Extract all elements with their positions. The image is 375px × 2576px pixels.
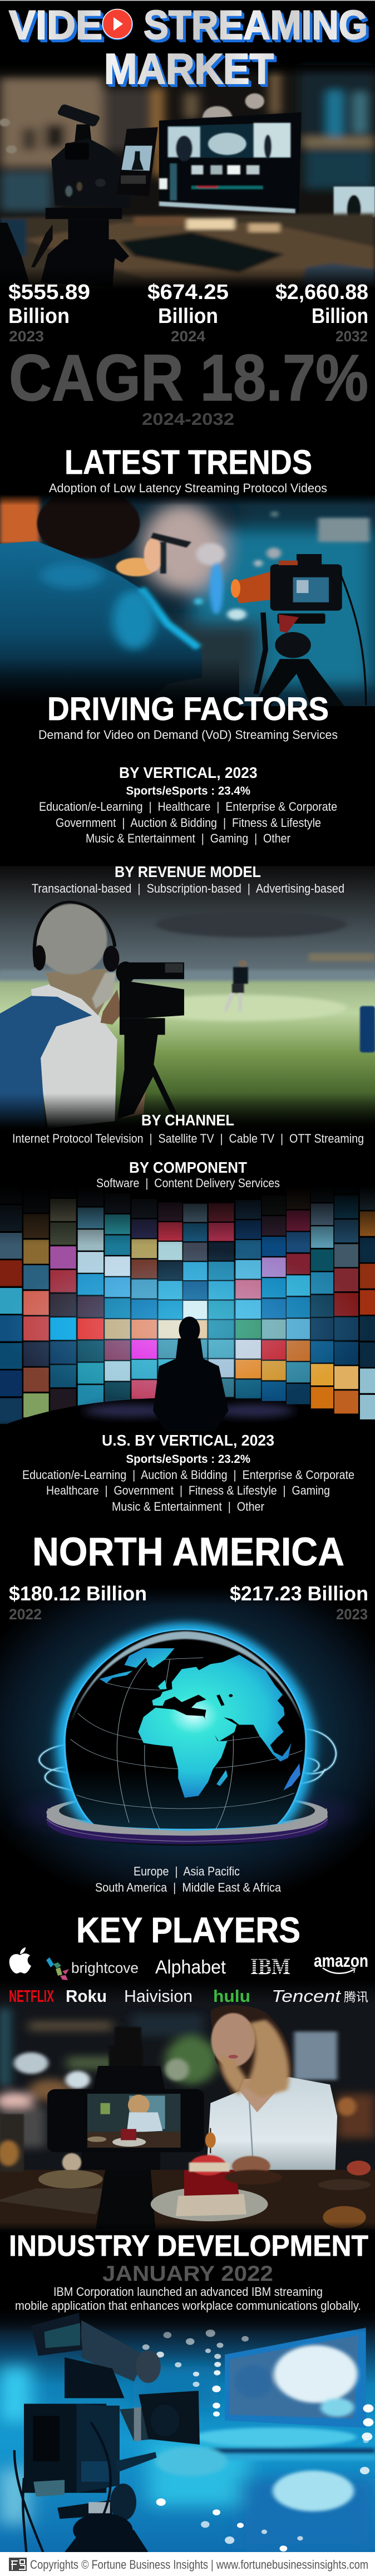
segment: by component: Software | Content Delivery Services <box>96 1176 280 1190</box>
player <box>224 960 248 1012</box>
segment: by vertical 2023 <box>39 764 337 845</box>
heading: key players: KEY PLAYERS <box>76 1910 300 1950</box>
photo: cameraman at stadium <box>0 866 375 1129</box>
heading: industry development <box>9 2230 368 2313</box>
phone preview <box>47 2089 204 2152</box>
market size stats: Billion <box>312 305 368 328</box>
cameraman <box>0 902 146 1129</box>
logo: brightcove: brightcove <box>71 1960 139 1976</box>
broadcast camera <box>116 962 184 1119</box>
north america stats: $180.12 Billion <box>9 1582 147 1605</box>
title: MARKET <box>104 45 274 93</box>
market size stats: $674.25 <box>147 281 229 304</box>
market size stats <box>8 281 368 345</box>
DSLR camera on tripod <box>231 554 366 706</box>
segment: by vertical 2023: Sports/eSports : 23.4% <box>126 785 250 797</box>
video wall tiles <box>0 1150 375 1424</box>
segment: U.S. by vertical 2023: Music & Entertainment | Other <box>112 1500 264 1514</box>
logo: tencent: 腾讯 <box>344 1990 368 2004</box>
other regions list: Europe | Asia Pacific <box>134 1864 240 1878</box>
photo: streaming camera and phone with editing monitor <box>0 63 375 286</box>
market size stats: 2032 <box>335 328 368 345</box>
other regions list <box>95 1864 282 1894</box>
segment: by vertical 2023: Government | Auction & Bidding | Fitness & Lifestyle <box>56 816 321 830</box>
title: VIDE <box>9 3 102 48</box>
segment: by component: BY COMPONENT <box>129 1159 247 1176</box>
table and cake <box>0 2114 375 2229</box>
market size stats: Billion <box>158 305 218 328</box>
heading: driving factors <box>38 691 338 742</box>
segment: by vertical 2023: Music & Entertainment | Gaming | Other <box>86 831 290 845</box>
segment: by vertical 2023: Education/e-Learning | Healthcare | Enterprise & Corporate <box>39 800 337 814</box>
market heading: north america: NORTH AMERICA <box>32 1530 344 1574</box>
graticule <box>71 1658 303 1830</box>
dark lower corner and arc fade <box>0 223 31 290</box>
logo: brightcove <box>46 1957 139 1980</box>
logo: roku: Roku <box>66 1986 107 2006</box>
north america stats <box>9 1582 368 1623</box>
person silhouette <box>153 1316 229 1431</box>
segment: by revenue model: BY REVENUE MODEL <box>115 863 261 880</box>
base ring <box>46 1793 328 1846</box>
segment: U.S. by vertical 2023 <box>22 1432 354 1514</box>
photo: woman filming cake with phone <box>0 1987 375 2230</box>
camera with microphone and phone <box>51 104 158 208</box>
key player logos <box>9 1947 368 2006</box>
logo: apple <box>9 1947 31 1973</box>
heading: latest trends <box>49 443 327 495</box>
CAGR callout: 2024-2032 <box>142 409 234 429</box>
bokeh lights <box>142 2329 373 2551</box>
base front lip <box>47 1808 328 1836</box>
tripod above phone <box>93 2027 165 2090</box>
segment: by vertical 2023: BY VERTICAL, 2023 <box>119 764 257 781</box>
logo: haivision: Haivision <box>124 1986 193 2006</box>
icon: play button <box>102 9 133 40</box>
segment: by channel <box>12 1111 364 1145</box>
segment: by component <box>96 1159 280 1190</box>
cameraman <box>0 488 202 706</box>
tripod <box>31 208 129 288</box>
market size stats: Billion <box>8 305 70 328</box>
other regions list: South America | Middle East & Africa <box>95 1880 282 1894</box>
title: MARKET <box>106 47 275 95</box>
title: MARKET <box>107 48 277 96</box>
market size stats: $555.89 <box>8 281 90 304</box>
market size stats: $2,660.88 <box>275 281 368 304</box>
heading: industry development: IBM Corporation launched an advanced IBM streaming <box>53 2285 323 2299</box>
right lower screen <box>334 187 375 224</box>
north america stats: 2022 <box>9 1606 42 1623</box>
logo: Fortune Business Insights <box>9 2558 27 2571</box>
floor arc and reflections <box>0 1398 375 1437</box>
woman <box>206 2005 337 2183</box>
north america stats: $217.23 Billion <box>230 1582 368 1605</box>
desk <box>0 213 375 290</box>
top fade of wall <box>0 1186 375 1246</box>
segment: U.S. by vertical 2023: Healthcare | Government | Fitness & Lifestyle | Gaming <box>46 1483 330 1497</box>
continents <box>99 1648 300 1798</box>
logo: alphabet: Alphabet <box>155 1957 226 1978</box>
segment: by revenue model <box>32 863 344 895</box>
segment: by channel: BY CHANNEL <box>141 1111 234 1129</box>
heading: driving factors: DRIVING FACTORS <box>47 691 329 727</box>
logo: IBM: IBM <box>250 1953 290 1979</box>
globe body <box>65 1629 306 1824</box>
heading: driving factors: Demand for Video on Demand (VoD) Streaming Services <box>38 728 338 742</box>
photo: person facing curved video wall <box>0 1192 375 1431</box>
title <box>9 3 371 96</box>
broadcast camera <box>14 2313 200 2552</box>
logo: hulu: hulu <box>213 1986 250 2006</box>
orbit rings <box>40 1729 336 1791</box>
photo: broadcast camera in blue studio <box>0 2313 375 2552</box>
market size stats: 2023 <box>9 328 44 345</box>
title: VIDE <box>12 6 105 51</box>
segment: U.S. by vertical 2023: Sports/eSports : 23.2% <box>126 1453 250 1466</box>
north america stats: 2023 <box>336 1606 368 1623</box>
heading: latest trends: LATEST TRENDS <box>65 443 312 481</box>
studio monitor <box>225 2328 366 2428</box>
logo: tencent: Tencent <box>272 1986 342 2006</box>
globe illustration <box>0 1591 375 1891</box>
segment: by revenue model: Transactional-based | Subscription-based | Advertising-based <box>32 881 344 895</box>
title: VIDE <box>10 4 103 49</box>
footer bar <box>0 2552 375 2576</box>
photo: cameraman and DSLR on tripod <box>0 494 375 706</box>
market size stats: 2024 <box>171 328 205 345</box>
heading: latest trends: Adoption of Low Latency Streaming Protocol Videos <box>49 481 327 495</box>
logo: tencent <box>272 1986 368 2006</box>
logo: netflix: NETFLIX <box>9 1986 54 2006</box>
monitor <box>159 112 302 213</box>
heading: industry development: JANUARY 2022 <box>102 2262 273 2286</box>
segment: U.S. by vertical 2023: U.S. BY VERTICAL, 2023 <box>102 1432 274 1449</box>
